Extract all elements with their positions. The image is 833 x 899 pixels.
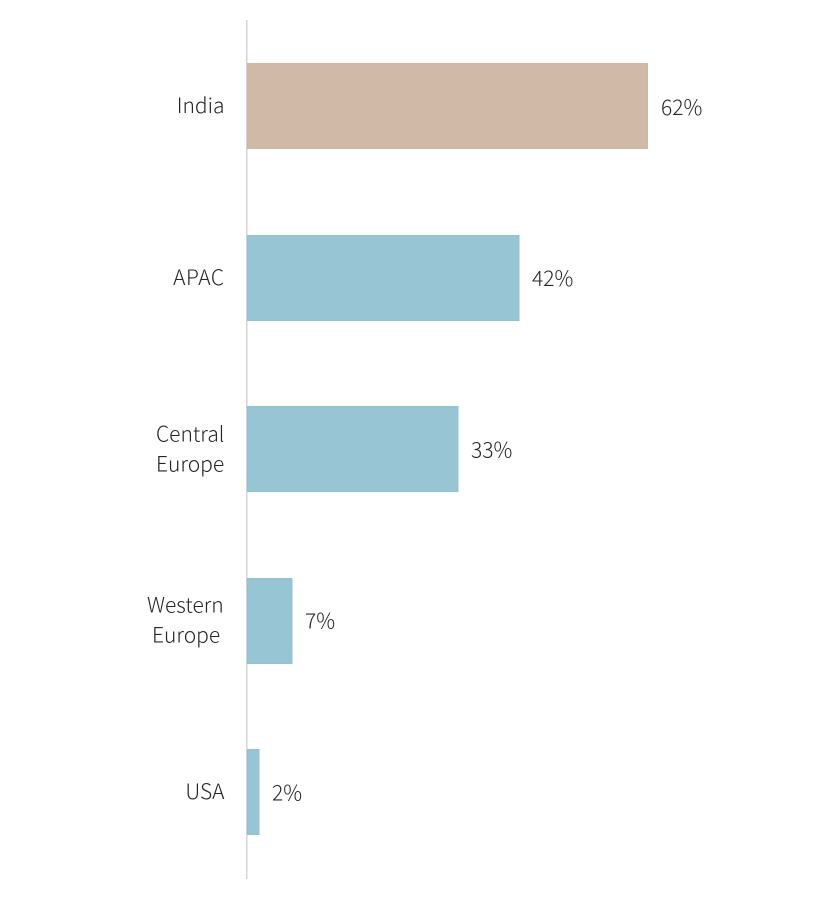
- bar: APAC: 42%: [532, 263, 573, 293]
- bar: APAC: APAC: [173, 262, 224, 292]
- bar: APAC: [173, 236, 573, 320]
- bar: Western Europe: 7%: [305, 606, 335, 636]
- bar: Central Europe: [156, 406, 512, 492]
- bar: Central Europe: 33%: [471, 434, 512, 464]
- bar: USA: USA: [185, 776, 225, 806]
- bar: Western Europe: [147, 578, 335, 664]
- bar: USA: 2%: [272, 778, 302, 808]
- axis line: [246, 20, 248, 879]
- bar: India: India: [177, 90, 224, 120]
- bar: Western Europe: Western: [147, 590, 224, 620]
- bar: India: [177, 64, 702, 148]
- bar: USA: [185, 750, 302, 834]
- bar: India: 62%: [661, 92, 702, 122]
- bar: Western Europe: Europe: [152, 620, 220, 650]
- bar: Central Europe: Europe: [156, 448, 224, 478]
- bar: Central Europe: Central: [156, 418, 224, 448]
